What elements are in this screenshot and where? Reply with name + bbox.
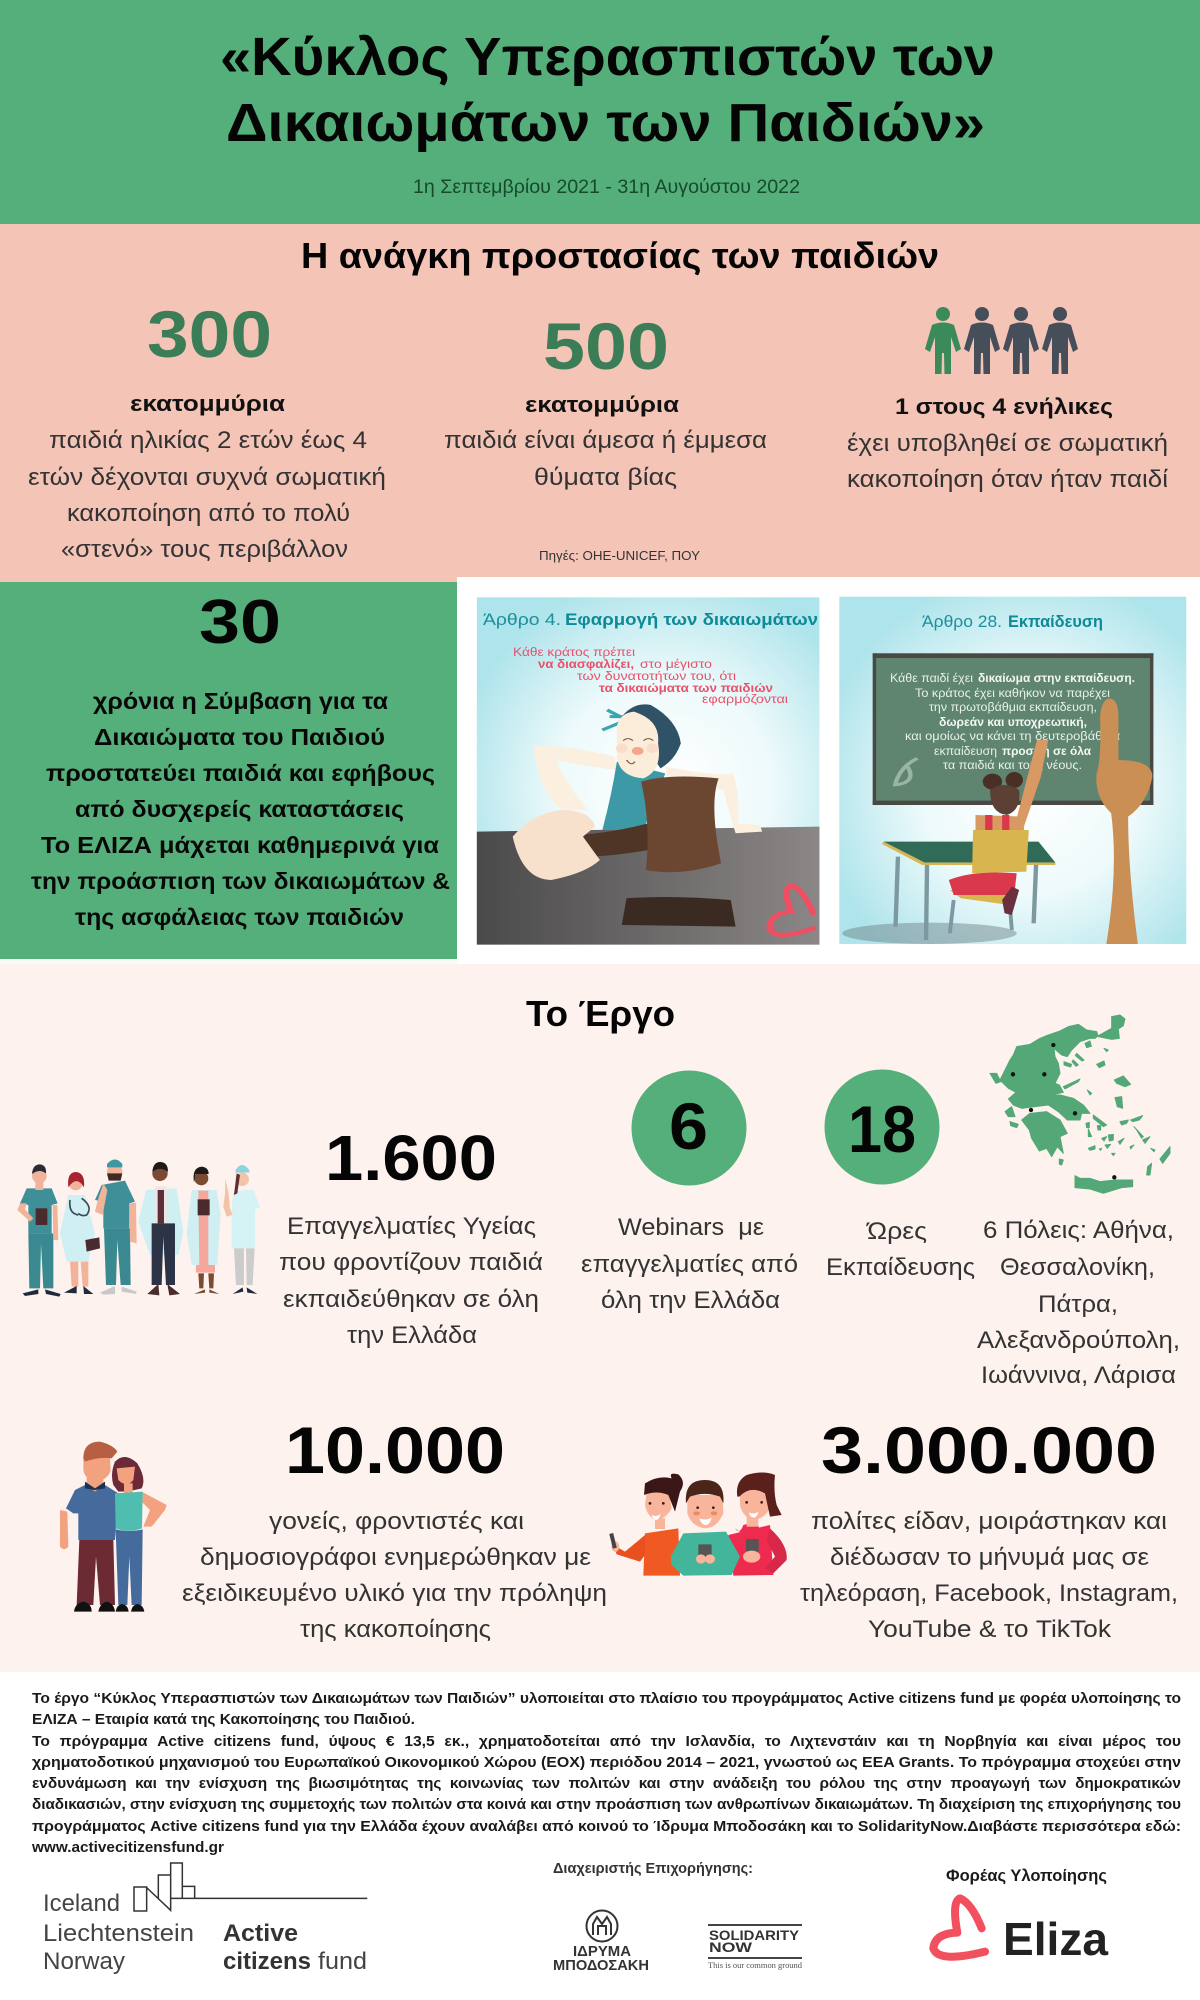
illustration: Article 28 poster: Κάθε παιδί έχει (890, 671, 973, 685)
footer: programme description: Το πρόγραμμα Active citizens fund, ύψους € 13,5 εκ., χρηματοδοτείται από την Ισλανδία, το Λιχτενστάιν και τη Νορβηγία και είναι μέρος του (32, 1734, 1181, 1750)
stat: 500 million: εκατομμύρια (525, 392, 680, 417)
illustration: Article 28 poster: την πρωτοβάθμια εκπαίδευση, (929, 700, 1097, 714)
stat: 18 training hours (824, 1070, 975, 1281)
illustration: Article 28 poster: δικαίωμα στην εκπαίδευση. (978, 671, 1135, 685)
logo: SolidarityNow: This is our common ground (708, 1961, 802, 1970)
logo: Active citizens fund: citizens (223, 1948, 311, 1975)
stat: 300 million: ετών δέχονται συχνά σωματική (28, 464, 386, 491)
stat: 1,600 professionals: 1.600 (325, 1122, 497, 1194)
footer: programme description: διαδικασιών, στην ενίσχυση της συμμετοχής των πολιτών στα κοινά και στην προάσπιση των ανθρωπίνων δικαιωμάτων. Τη διαχείριση της επιχορήγησης του (32, 1797, 1181, 1813)
cities list: Θεσσαλονίκη, (1000, 1254, 1155, 1281)
illustration: Article 4 poster (477, 597, 819, 945)
stat: 300 million (28, 297, 386, 563)
implementing body heading: Φορέας Υλοποίησης (946, 1867, 1107, 1885)
footer: programme description: χρηματοδοτικού μηχανισμού του Ευρωπαϊκού Οικονομικού Χώρου (ΕΟΧ) περιόδου 2014 – 2021, γνωστού ως EEA Grants. Το πρόγραμμα στοχεύει στην (32, 1755, 1181, 1771)
stat: 10,000 parents and carers: της κακοποίησης (300, 1616, 491, 1643)
icon: parents (60, 1442, 167, 1612)
footer: programme description: www.activecitizensfund.gr (31, 1840, 224, 1856)
illustration: Article 4 poster: εφαρμόζονται (702, 692, 788, 706)
logo: Bodossaki Foundation: ΙΔΡΥΜΑ (573, 1943, 631, 1960)
illustration: Article 28 poster: δωρεάν και υποχρεωτική, (939, 715, 1087, 729)
logo: Bodossaki Foundation (553, 1910, 649, 1974)
cities list (977, 1217, 1180, 1389)
stat: 3,000,000 citizens reached: πολίτες είδαν, μοιράστηκαν και (811, 1508, 1167, 1535)
stat: 6 webinars (581, 1070, 798, 1314)
illustration: Article 4 poster: Άρθρο 4. (483, 610, 561, 629)
panel: 30 years of the Convention: 30 (199, 588, 281, 657)
cities list: Αλεξανδρούπολη, (977, 1327, 1180, 1354)
stat: 1,600 professionals (279, 1122, 543, 1349)
stat: 3,000,000 citizens reached: YouTube & το TikTok (868, 1616, 1112, 1643)
illustration: Article 4 poster: να διασφαλίζει, (538, 657, 634, 671)
header panel (0, 0, 1200, 224)
title: Δικαιωμάτων των Παιδιών» (226, 93, 985, 153)
stat: 1,600 professionals: που φροντίζουν παιδιά (279, 1249, 543, 1276)
logo: Bodossaki Foundation: ΜΠΟΔΟΣΑΚΗ (553, 1957, 649, 1974)
stat: 10,000 parents and carers: εξειδικευμένο υλικό για την πρόληψη (182, 1580, 607, 1607)
footer: programme description: προγράμματος Active citizens fund για την Ελλάδα έχουν αναλάβει από κοινού το Ίδρυμα Μποδοσάκη και το SolidarityNow.Διαβάστε περισσότερα εδώ: (32, 1819, 1181, 1835)
footer: programme description: Το έργο “Κύκλος Υπερασπιστών των Δικαιωμάτων των Παιδιών” υλοποιείται στο πλαίσιο του προγράμματος Active citizens fund με φορέα υλοποίησης το (32, 1691, 1181, 1707)
illustration: Article 28 poster (839, 597, 1186, 944)
illustration: Article 28 poster: προσιτή σε όλα (1002, 744, 1092, 758)
stat: 6 webinars: 6 (669, 1089, 708, 1163)
panel: 30 years of the Convention (0, 582, 457, 959)
cities list: Ιωάννινα, Λάρισα (981, 1362, 1176, 1389)
illustration: Article 4 poster: Εφαρμογή των δικαιωμάτων (565, 610, 818, 629)
icon: healthcare professionals (17, 1159, 260, 1297)
stat: 1,600 professionals: Επαγγελματίες Υγείας (287, 1213, 536, 1240)
title: «Κύκλος Υπερασπιστών των (220, 27, 995, 87)
stat: 10,000 parents and carers (182, 1413, 607, 1643)
illustration: Article 28 poster: Άρθρο 28. (922, 612, 1002, 631)
panel: 30 years of the Convention: Δικαιώματα του Παιδιού (94, 724, 385, 750)
stat: 1,600 professionals: εκπαιδεύθηκαν σε όλη (283, 1286, 539, 1313)
map: Greece with six city pins (990, 1015, 1170, 1193)
logo: Active citizens fund: Iceland (43, 1890, 120, 1917)
stat: 3,000,000 citizens reached: διέδωσαν το μήνυμά μας σε (830, 1544, 1149, 1571)
stat: 1 in 4 adults: έχει υποβληθεί σε σωματική (847, 430, 1168, 457)
stat: 500 million: παιδιά είναι άμεσα ή έμμεσα (444, 427, 767, 454)
logo: Eliza: Eliza (1003, 1913, 1108, 1965)
stat: 300 million: κακοποίηση από το πολύ (67, 500, 350, 527)
stat: 3,000,000 citizens reached: 3.000.000 (821, 1413, 1157, 1487)
stat: 6 webinars: όλη την Ελλάδα (601, 1287, 780, 1314)
stat: 6 webinars: επαγγελματίες από (581, 1251, 798, 1278)
grant managers heading: Διαχειριστής Επιχορήγησης: (553, 1860, 753, 1877)
title (220, 27, 995, 153)
stat: 10,000 parents and carers: 10.000 (285, 1413, 505, 1487)
stat: 500 million (444, 309, 767, 491)
stat: 500 million: θύματα βίας (534, 464, 677, 491)
logo: Active citizens fund: fund (318, 1948, 367, 1975)
logo: Active citizens fund (43, 1863, 367, 1975)
logo: SolidarityNow (708, 1924, 802, 1970)
stat: 3,000,000 citizens reached: τηλεόραση, Facebook, Instagram, (800, 1580, 1178, 1607)
illustration: Article 4 poster: των δυνατοτήτων του, ότι (577, 669, 736, 683)
footer: programme description (31, 1691, 1181, 1856)
stat: 18 training hours: 18 (848, 1092, 916, 1166)
panel: 30 years of the Convention: χρόνια η Σύμβαση για τα (93, 688, 388, 714)
sources: Πηγές: ΟΗΕ-UNICEF, ΠΟΥ (539, 548, 700, 563)
logo: Active citizens fund: Liechtenstein (43, 1920, 194, 1947)
stat: 18 training hours: Ώρες (866, 1218, 927, 1245)
stat: 300 million: παιδιά ηλικίας 2 ετών έως 4 (49, 427, 367, 454)
cities list: Πάτρα, (1038, 1291, 1118, 1318)
section heading: Το Έργο (526, 993, 675, 1034)
cities list: 6 Πόλεις: Αθήνα, (983, 1217, 1174, 1244)
icon: three teens with phones (609, 1472, 787, 1576)
panel: 30 years of the Convention: Το ΕΛΙΖΑ μάχεται καθημερινά για (41, 832, 439, 858)
illustration: Article 28 poster: τα παιδιά και τους νέους. (943, 758, 1082, 772)
stat: 300 million: «στενό» τους περιβάλλον (61, 536, 348, 563)
stat: 18 training hours: Εκπαίδευσης (826, 1254, 975, 1281)
stat: 10,000 parents and carers: δημοσιογράφοι ενημερώθηκαν με (200, 1544, 591, 1571)
stat: 1,600 professionals: την Ελλάδα (347, 1322, 477, 1349)
icon: four people (925, 307, 1078, 374)
stat: 300 million: εκατομμύρια (130, 391, 286, 416)
panel: 30 years of the Convention: την προάσπιση των δικαιωμάτων & (31, 868, 450, 894)
section heading: Η ανάγκη προστασίας των παιδιών (301, 235, 939, 276)
stat: 10,000 parents and carers: γονείς, φροντιστές και (269, 1508, 524, 1535)
illustration: Article 28 poster: Το κράτος έχει καθήκον να παρέχει (915, 686, 1110, 700)
illustration: Article 4 poster: Κάθε κράτος πρέπει (513, 645, 635, 659)
stat: 3,000,000 citizens reached (800, 1413, 1178, 1643)
footer: programme description: ΕΛΙΖΑ – Εταιρία κατά της Κακοποίησης του Παιδιού. (32, 1712, 415, 1728)
panel: need for child protection (0, 224, 1200, 582)
panel: the project (0, 959, 1200, 1672)
logo: Active citizens fund: Norway (43, 1948, 125, 1975)
stat: 1 in 4 adults (847, 307, 1169, 493)
panel: 30 years of the Convention: της ασφάλειας των παιδιών (75, 904, 404, 930)
illustration: Article 28 poster: εκπαίδευση (934, 744, 997, 758)
stat: 1 in 4 adults: κακοποίηση όταν ήταν παιδί (847, 466, 1169, 493)
illustration: Article 4 poster: στο μέγιστο (640, 657, 712, 671)
stat: 300 million: 300 (147, 297, 272, 371)
stat: 6 webinars: Webinars με (618, 1214, 764, 1241)
logo: Active citizens fund: Active (223, 1920, 298, 1947)
illustration: Article 4 poster: τα δικαιώματα των παιδιών (599, 681, 773, 695)
illustration: Article 28 poster: Εκπαίδευση (1008, 612, 1103, 631)
stat: 500 million: 500 (543, 309, 669, 383)
project dates: 1η Σεπτεμβρίου 2021 - 31η Αυγούστου 2022 (413, 176, 800, 198)
stat: 1 in 4 adults: 1 στους 4 ενήλικες (895, 394, 1113, 419)
logo: SolidarityNow: NOW (709, 1939, 753, 1955)
illustration: Article 28 poster: και ομοίως να κάνει τη δευτεροβάθμια (905, 729, 1120, 743)
logo: Eliza (933, 1898, 1108, 1965)
footer: programme description: ενδυνάμωση και την ενίσχυση της βιωσιμότητας της κοινωνίας των πολιτών και στην ανάδειξη του ρόλου της στην προαγωγή των δημοκρατικών (32, 1776, 1181, 1792)
panel: 30 years of the Convention: προστατεύει παιδιά και εφήβους (46, 760, 435, 786)
panel: 30 years of the Convention: από δυσχερείς καταστάσεις (75, 796, 404, 822)
logo: SolidarityNow: SOLIDARITY (709, 1927, 800, 1943)
